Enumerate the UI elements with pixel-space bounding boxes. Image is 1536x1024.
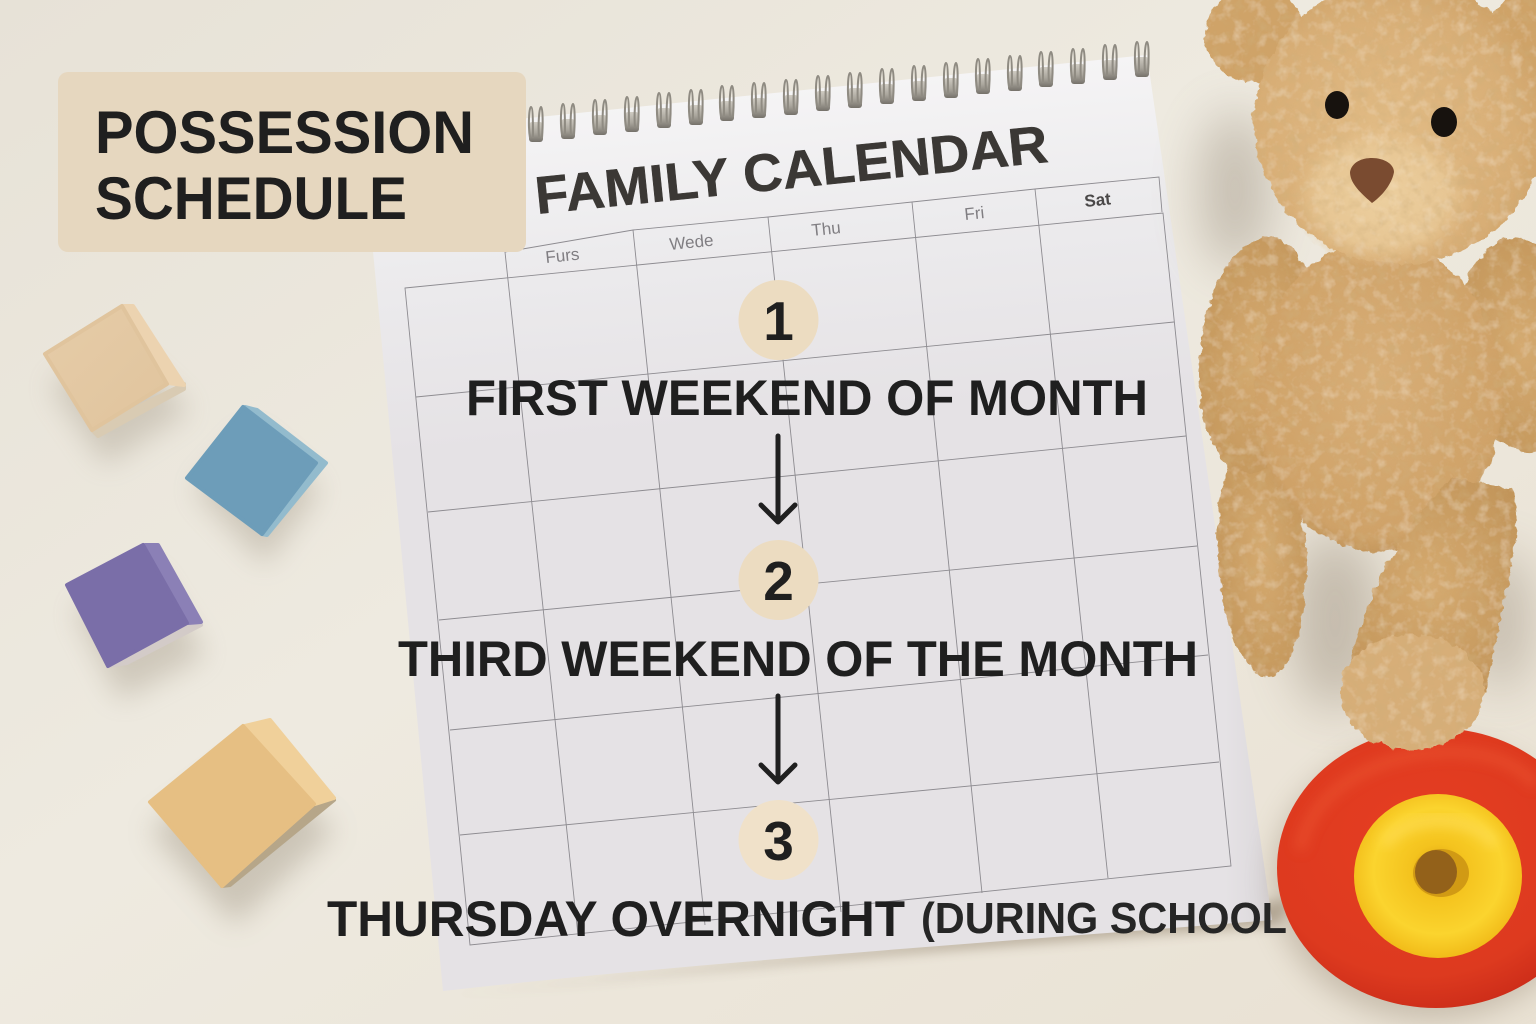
weekday labels: Furs [544, 245, 580, 267]
step 2 number badge [738, 540, 818, 620]
bear shadow [1200, 110, 1530, 710]
step 3 number badge: 3 [763, 810, 794, 872]
body [1254, 240, 1502, 552]
weekday labels: Wede [668, 231, 714, 254]
step 3 label: THURSDAY OVERNIGHT [327, 891, 905, 947]
calendar title: FAMILY CALENDAR [532, 115, 1051, 226]
arrow: step 1 to step 2 [761, 436, 795, 522]
right arm [1449, 231, 1536, 459]
ear left [1205, 0, 1305, 83]
step 2 [398, 540, 1198, 687]
calendar grid [405, 177, 1231, 945]
right foot [1340, 634, 1484, 750]
step 1 number badge: 1 [763, 290, 794, 352]
step 3 number badge [738, 800, 818, 880]
left leg [1212, 431, 1312, 679]
step 1 number badge [738, 280, 818, 360]
bear nose [1350, 158, 1394, 203]
bear eyes [1325, 91, 1457, 137]
title badge [58, 72, 526, 252]
red ring [1277, 728, 1536, 1008]
paper shadow [445, 900, 1290, 996]
title text: POSSESSION [95, 99, 474, 166]
calendar sheet [362, 42, 1290, 996]
block: large tan wood [150, 720, 335, 925]
block: purple [67, 545, 205, 700]
wooden blocks group [45, 306, 335, 925]
step 2 label: THIRD WEEKEND OF THE MONTH [398, 631, 1198, 687]
ring hole [1413, 849, 1469, 897]
weekday labels: Sat [1083, 189, 1112, 211]
step 3 [327, 800, 1287, 947]
step 1 label: FIRST WEEKEND OF MONTH [466, 370, 1148, 426]
paper [362, 55, 1272, 991]
step 1 [466, 280, 1148, 426]
step 3 label continuation: (DURING SCHOOL [921, 894, 1287, 943]
title text: SCHEDULE [95, 165, 407, 232]
arrow: step 2 to step 3 [761, 696, 795, 782]
ear right [1490, 0, 1536, 83]
right leg [1345, 478, 1516, 690]
teddy bear [1188, 0, 1536, 750]
left arm [1188, 232, 1328, 478]
weekday labels: Thu [810, 218, 842, 240]
block: blue [187, 407, 326, 565]
muzzle [1290, 123, 1474, 267]
red and yellow stacking toy [1272, 728, 1536, 1020]
step 2 number badge: 2 [763, 550, 794, 612]
spiral binding [529, 42, 1149, 142]
yellow ring [1354, 794, 1522, 958]
weekday labels: Fri [963, 203, 985, 224]
title text [95, 99, 474, 232]
head [1254, 0, 1536, 264]
weekday labels [544, 189, 1112, 267]
block: tan wood [45, 306, 190, 465]
